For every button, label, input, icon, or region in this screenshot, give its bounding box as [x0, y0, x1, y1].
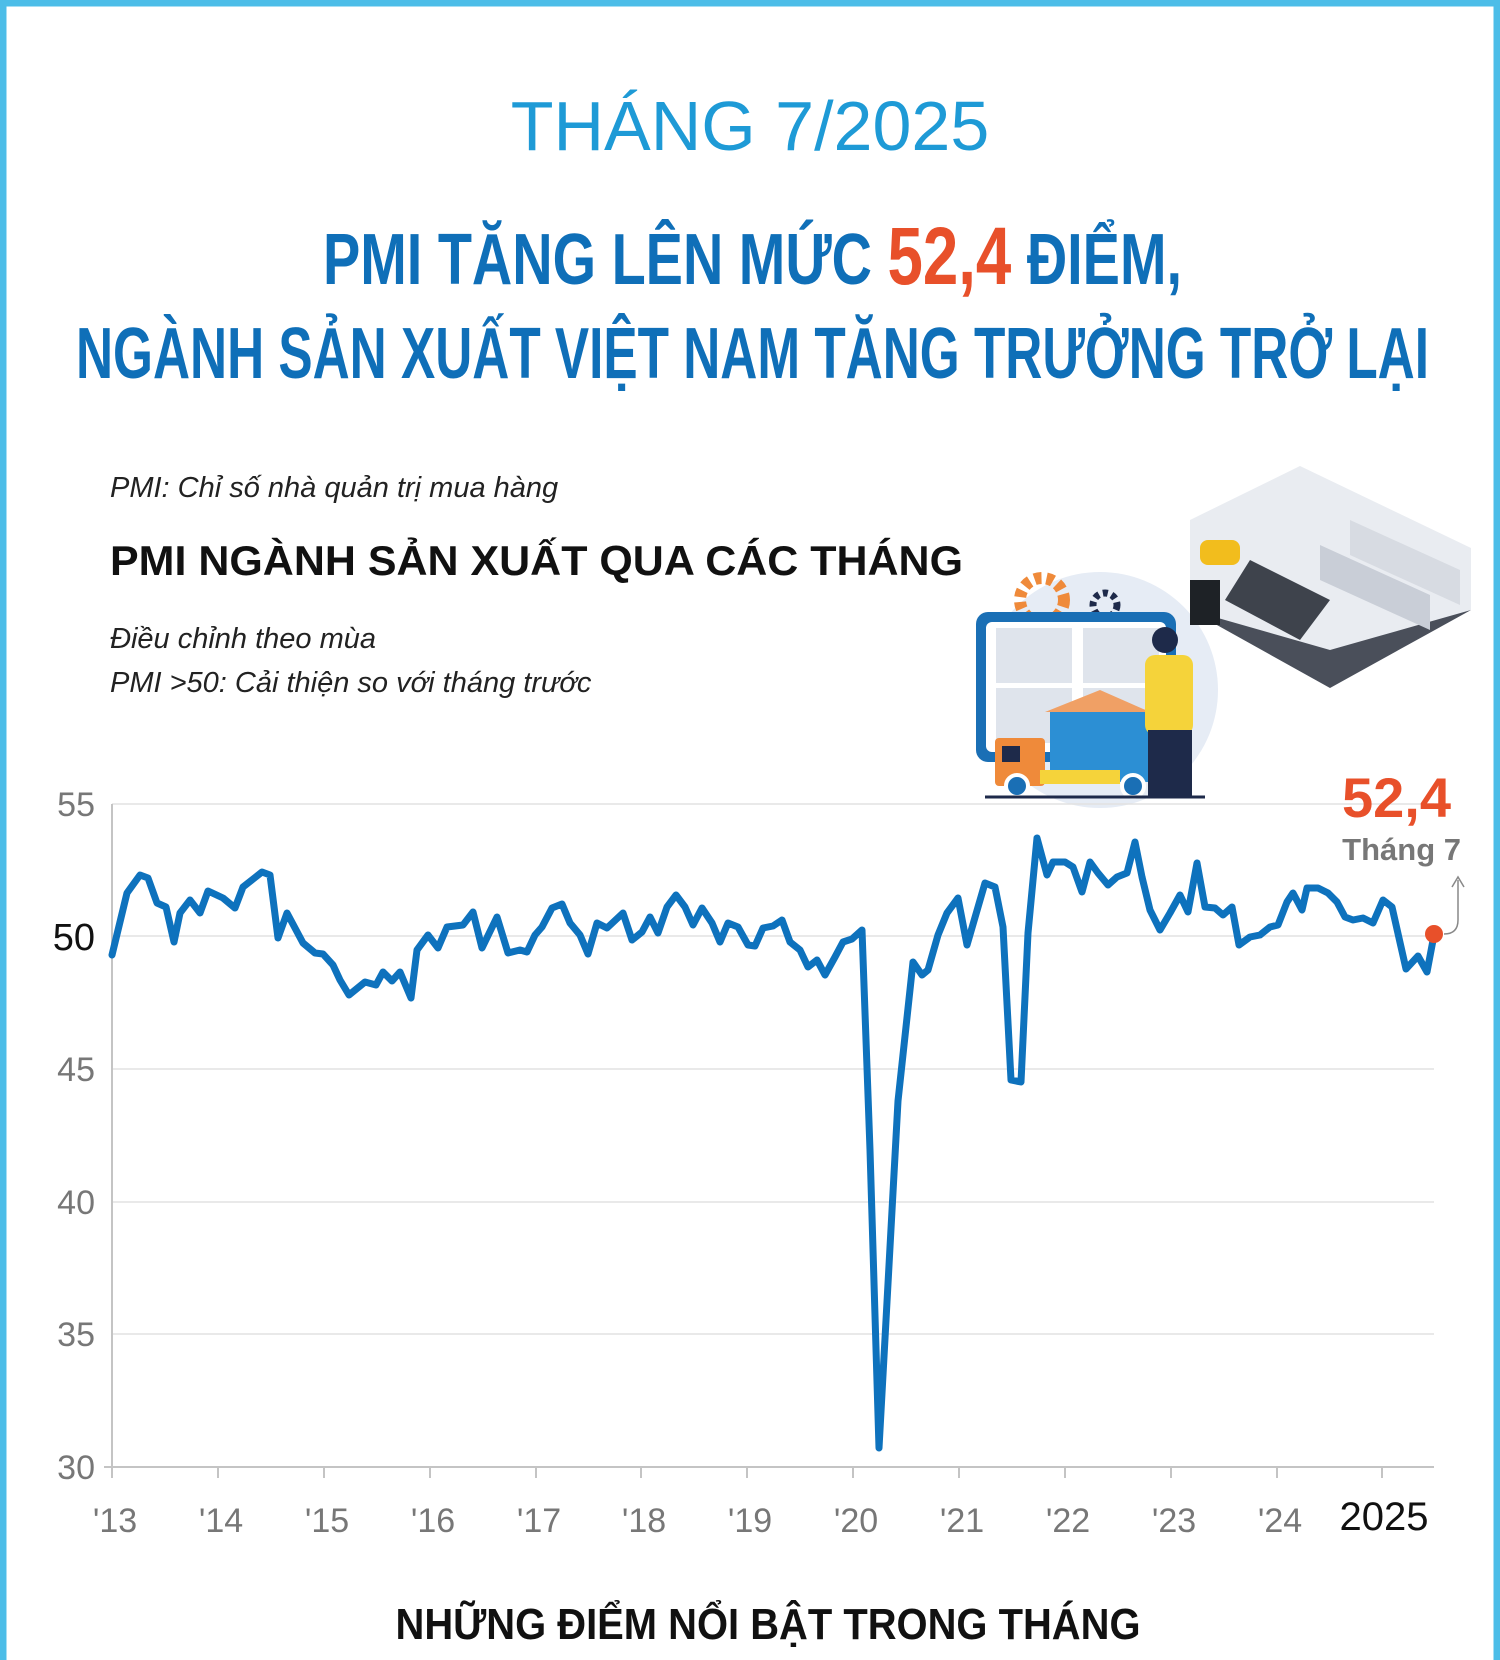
- illustration: isometric factory: [1190, 466, 1471, 688]
- headline line 1: PMI TĂNG LÊN MỨC 52,4 ĐIỂM,: [323, 211, 1182, 302]
- illustration: logistics worker: [976, 572, 1218, 808]
- note: PMI definition: PMI: Chỉ số nhà quản trị mua hàng: [110, 472, 558, 504]
- chart title: PMI NGÀNH SẢN XUẤT QUA CÁC THÁNG: [110, 536, 963, 584]
- chart: gridlines and axes: [112, 804, 1434, 1334]
- x-axis labels: '16: [411, 1502, 455, 1540]
- y-axis labels: [53, 786, 95, 1487]
- title: month: THÁNG 7/2025: [511, 87, 989, 165]
- x-axis labels: '15: [305, 1502, 349, 1540]
- x-axis labels: '20: [834, 1502, 878, 1540]
- section heading: NHỮNG ĐIỂM NỔI BẬT TRONG THÁNG: [396, 1598, 1140, 1649]
- x-axis labels: '21: [940, 1502, 984, 1540]
- callout: latest value: 52,4: [1342, 766, 1451, 829]
- PMI line: [112, 838, 1434, 1448]
- x-axis labels: '19: [728, 1502, 772, 1540]
- x-axis labels: '18: [622, 1502, 666, 1540]
- callout: latest value: Tháng 7: [1342, 832, 1461, 867]
- y-axis labels: 50: [53, 917, 95, 959]
- x-axis labels: '22: [1046, 1502, 1090, 1540]
- y-axis labels: 55: [57, 786, 95, 824]
- latest point marker: [1425, 925, 1443, 943]
- x-axis labels: '17: [517, 1502, 561, 1540]
- x-axis labels: '24: [1258, 1502, 1302, 1540]
- chart notes: Điều chỉnh theo mùa: [110, 623, 376, 655]
- x-axis labels: '23: [1152, 1502, 1196, 1540]
- x-axis labels: '13: [93, 1502, 137, 1540]
- y-axis labels: 35: [57, 1316, 95, 1354]
- x-axis labels: [93, 1495, 1428, 1540]
- y-axis labels: 45: [57, 1051, 95, 1089]
- y-axis labels: 40: [57, 1184, 95, 1222]
- x-axis labels: '14: [199, 1502, 243, 1540]
- y-axis labels: 30: [57, 1449, 95, 1487]
- chart notes: [110, 623, 592, 699]
- callout: latest value: [1342, 766, 1464, 934]
- chart notes: PMI >50: Cải thiện so với tháng trước: [110, 667, 592, 699]
- x-axis labels: 2025: [1340, 1495, 1428, 1539]
